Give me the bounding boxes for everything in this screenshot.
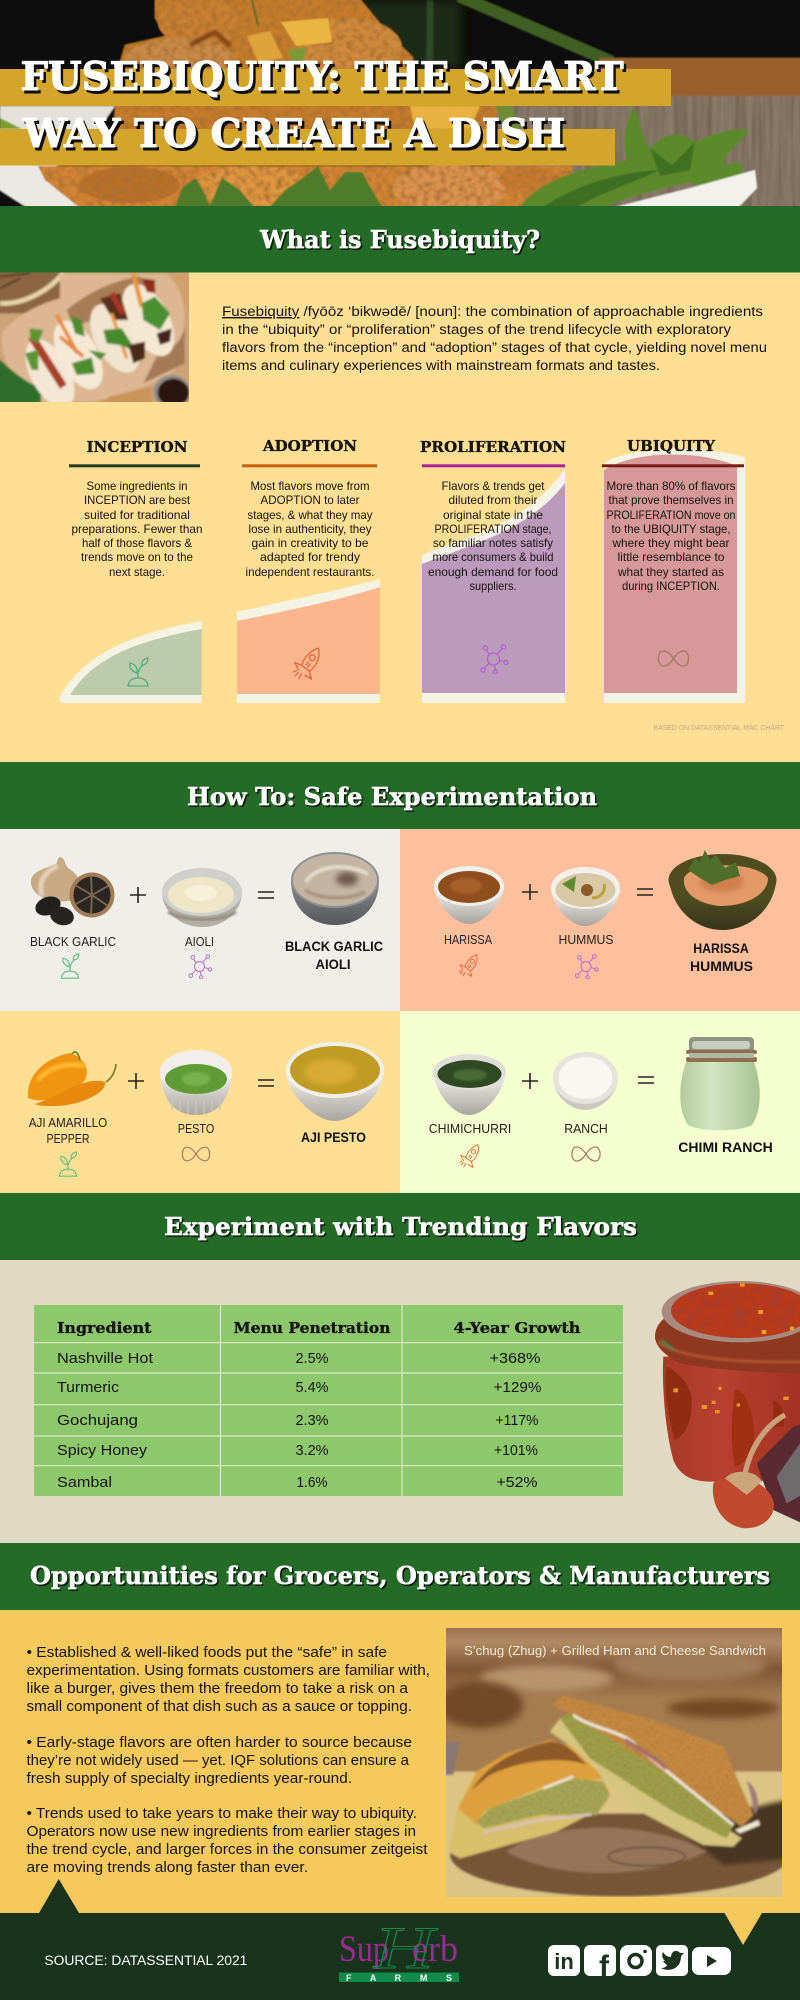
row: Spicy Honey — [57, 1443, 538, 1459]
row: Sambal: Sambal — [57, 1475, 112, 1491]
photo caption: S’chug (Zhug) + Grilled Ham and Cheese Sandwich — [464, 1643, 766, 1658]
bullet three: • Trends used to take years to make their way to ubiquity. — [26, 1806, 417, 1822]
inception body text: suited for traditional — [84, 508, 190, 522]
trending flavors table — [34, 1305, 623, 1496]
adoption body text: independent restaurants. — [246, 565, 374, 579]
adoption body text: ADOPTION to later — [260, 493, 360, 507]
ubiquity heading: UBIQUITY — [627, 437, 715, 455]
panel: chimi ranch — [400, 1011, 800, 1193]
stage: inception — [59, 438, 202, 703]
proliferation body text: Flavors & trends get — [442, 479, 545, 493]
section header: How To: How To: Safe Experimentation — [187, 782, 597, 811]
food: aji pesto bowl — [286, 1042, 384, 1121]
footer — [0, 1879, 800, 2000]
food: ranch bowl — [553, 1052, 618, 1110]
bullet two — [26, 1735, 412, 1787]
row: Nashville Hot: +368% — [490, 1351, 541, 1367]
bullet three: are moving trends along faster than ever. — [26, 1860, 308, 1876]
proliferation body text: original state in the — [443, 508, 543, 522]
row: Spicy Honey: 3.2% — [296, 1443, 329, 1459]
icon: sprout — [61, 954, 79, 978]
equals sign — [638, 1077, 654, 1083]
row: Gochujang: Gochujang — [57, 1413, 138, 1429]
result label: chimi ranch: CHIMI RANCH — [678, 1140, 773, 1155]
proliferation body text: suppliers. — [470, 579, 516, 593]
label: aji amarillo pepper: PEPPER — [46, 1131, 90, 1146]
adoption curve chart — [237, 579, 380, 703]
icon: sprout — [128, 658, 148, 686]
row: Turmeric: +129% — [494, 1380, 542, 1396]
plus sign — [130, 887, 146, 903]
result label: harissa hummus: HUMMUS — [690, 959, 753, 974]
section header: Experiment with Trending Flavors: Experiment with Trending Flavors — [164, 1212, 637, 1241]
icon: twitter — [656, 1945, 688, 1976]
proliferation body text — [428, 479, 558, 593]
inception body text — [72, 479, 202, 579]
photo: bao tacos — [0, 272, 189, 402]
plus sign — [522, 1073, 538, 1089]
equals sign — [258, 1080, 274, 1086]
adoption body text — [246, 479, 374, 579]
label: pesto: PESTO — [178, 1121, 214, 1136]
bullet two: fresh supply of specialty ingredients year-round. — [26, 1771, 352, 1787]
inception curve chart — [59, 621, 201, 703]
food: chimichurri bowl — [433, 1054, 506, 1115]
definition text block: Fusebiquity /fyōōz ‘bikwədē/ [noun]: the combination of approachable ingredients — [222, 304, 763, 320]
bullet two: they’re not widely used — yet. IQF solutions can ensure a — [26, 1753, 410, 1769]
proliferation body text: so familiar notes satisfy — [433, 536, 553, 550]
bullet one: • Established & well-liked foods put the “safe” in safe — [26, 1645, 387, 1661]
logo: SupHerb Farms: H — [373, 1915, 439, 1981]
icon: molecule — [575, 955, 598, 979]
panel: harissa hummus — [400, 829, 800, 1011]
chart source note: BASED ON DATASSENTIAL MAC CHART — [654, 725, 785, 732]
icon: infinity — [182, 1147, 210, 1161]
ubiquity curve chart — [604, 449, 745, 703]
food: aioli bowl — [162, 868, 242, 927]
icon: molecule — [481, 645, 508, 674]
speech pointer down — [724, 1913, 762, 1945]
panel: opportunities — [0, 1610, 800, 1918]
icon: linkedin — [548, 1945, 580, 1976]
food: chimi ranch jar — [680, 1037, 760, 1130]
row: Spicy Honey: Spicy Honey — [57, 1443, 148, 1459]
row: Sambal: +52% — [496, 1475, 538, 1491]
ubiquity body text: where they might bear — [611, 536, 730, 550]
icon: rocket — [293, 648, 319, 679]
ubiquity body text: what they started as — [617, 565, 724, 579]
icon: rocket — [459, 955, 477, 976]
ubiquity body text: during INCEPTION. — [622, 579, 720, 593]
result label: harissa hummus: HARISSA — [693, 941, 749, 956]
logo: SupHerb Farms: Sup — [339, 1929, 389, 1970]
ubiquity body text: that prove themselves in — [608, 493, 734, 507]
stage: proliferation — [420, 438, 566, 703]
food: hummus bowl — [551, 867, 620, 926]
label: chimichurri: CHIMICHURRI — [429, 1121, 511, 1136]
title text line two: WAY TO CREATE A DISH — [22, 111, 565, 157]
icon: instagram — [620, 1945, 652, 1976]
equals sign — [258, 892, 274, 898]
adoption body text: lose in authenticity, they — [248, 522, 372, 536]
row: Sambal: 1.6% — [296, 1475, 328, 1491]
section header: Opportunities — [0, 1543, 800, 1610]
inception heading: INCEPTION — [86, 438, 188, 456]
result label: black garlic aioli: BLACK GARLIC — [285, 939, 383, 954]
label: aji amarillo pepper: AJI AMARILLO — [29, 1115, 107, 1130]
inception body text: INCEPTION are best — [84, 493, 191, 507]
result label: harissa hummus — [690, 941, 753, 974]
logo: SupHerb Farms — [339, 1915, 459, 1983]
bullet one: small component of that dish such as a sauce or topping. — [26, 1699, 412, 1715]
bullet two: • Early-stage flavors are often harder to source because — [26, 1735, 412, 1751]
inception body text: half of those flavors & — [82, 536, 192, 550]
row: Turmeric: 5.4% — [296, 1380, 329, 1396]
table header: Menu Penetration — [234, 1320, 391, 1337]
label: aioli: AIOLI — [185, 934, 214, 949]
icon: linkedin: in — [554, 1949, 574, 1974]
source text: SOURCE: DATASSENTIAL 2021 — [44, 1952, 248, 1968]
row: Turmeric: Turmeric — [57, 1380, 119, 1396]
bullet one: like a burger, gives them the freedom to take a risk on a — [26, 1681, 409, 1697]
plus sign — [128, 1073, 144, 1089]
plus sign — [522, 884, 538, 900]
result label: black garlic aioli: AIOLI — [316, 957, 350, 972]
food: black garlic aioli bowl — [291, 852, 379, 925]
proliferation body text: PROLIFERATION stage, — [434, 522, 552, 536]
table header — [57, 1320, 581, 1337]
icon: sprout — [59, 1152, 77, 1176]
photo: grilled ham and cheese sandwich — [446, 1628, 782, 1897]
section header: Experiment with Trending Flavors — [0, 1193, 800, 1260]
inception body text: Some ingredients in — [86, 479, 188, 493]
social icons — [548, 1945, 731, 1983]
row: Gochujang: 2.3% — [296, 1413, 329, 1429]
icon: infinity — [658, 651, 689, 666]
title banner — [0, 54, 671, 166]
section header: Opportunities: Opportunities for Grocers, Operators & Manufacturers — [30, 1561, 770, 1590]
panel: aji pesto — [0, 1011, 400, 1193]
row: Turmeric — [57, 1380, 542, 1396]
food: harissa bowl — [434, 866, 504, 924]
row: Sambal — [57, 1475, 538, 1491]
logo: SupHerb Farms: erb — [412, 1929, 458, 1970]
proliferation body text: diluted from their — [448, 493, 538, 507]
label: harissa: HARISSA — [444, 932, 492, 947]
label: black garlic: BLACK GARLIC — [30, 934, 116, 949]
row: Gochujang: +117% — [496, 1413, 539, 1429]
gold bar: line two — [0, 129, 615, 166]
adoption body text: adapted for trendy — [260, 550, 360, 564]
title text line one: FUSEBIQUITY: THE SMART — [20, 54, 624, 100]
bullet three: Operators now use new ingredients from earlier stages in — [26, 1824, 416, 1840]
panel: trending flavors — [0, 1260, 800, 1543]
speech pointer up — [39, 1879, 79, 1913]
definition text block: items and culinary experiences with mainstream formats and tastes. — [222, 358, 660, 374]
hero photo: fried chicken on a plate — [0, 0, 800, 216]
inception body text: preparations. Fewer than — [72, 522, 202, 536]
adoption body text: gain in creativity to be — [252, 536, 369, 550]
proliferation body text: more consumers & build — [432, 550, 554, 564]
icon: rocket — [459, 1145, 478, 1167]
table header: Ingredient — [57, 1320, 152, 1337]
proliferation curve chart — [422, 469, 565, 703]
ubiquity body text: More than 80% of flavors — [606, 479, 736, 493]
result label: black garlic aioli — [285, 939, 383, 972]
ubiquity body text: to the UBIQUITY stage, — [612, 522, 730, 536]
food: pesto ramekin — [160, 1050, 232, 1115]
row: Spicy Honey: +101% — [494, 1443, 538, 1459]
inception body text: trends move on to the — [81, 550, 193, 564]
row: Nashville Hot — [57, 1351, 541, 1367]
label: aji amarillo pepper — [29, 1115, 107, 1146]
definition text block: in the “ubiquity” or “proliferation” stages of the trend lifecycle with exploratory — [222, 322, 732, 338]
row: Nashville Hot: Nashville Hot — [57, 1351, 153, 1367]
ubiquity body text: PROLIFERATION move on — [606, 508, 736, 522]
result label: aji pesto: AJI PESTO — [301, 1130, 366, 1145]
ubiquity body text: little resemblance to — [618, 550, 725, 564]
ubiquity body text — [606, 479, 736, 593]
section header: How To — [0, 762, 800, 829]
row: Gochujang — [57, 1413, 539, 1429]
adoption body text: stages, & what they may — [248, 508, 373, 522]
bullet one — [26, 1645, 430, 1715]
icon: facebook: f — [599, 1950, 610, 1983]
photo: jar of chili paste and dried chili — [655, 1281, 800, 1530]
inception body text: next stage. — [109, 565, 165, 579]
definition text block: flavors from the “inception” and “adoption” stages of that cycle, yielding novel menu — [222, 340, 767, 356]
stage: adoption — [237, 437, 380, 703]
section header: What is Fusebiquity: What is Fusebiquity? — [259, 225, 540, 254]
food: black garlic — [31, 857, 114, 928]
proliferation body text: enough demand for food — [428, 565, 558, 579]
bullet three — [26, 1806, 427, 1876]
section header: What is Fusebiquity — [0, 206, 800, 272]
definition text block — [222, 304, 767, 374]
adoption heading: ADOPTION — [262, 437, 357, 455]
stage: ubiquity — [602, 437, 745, 703]
label: ranch: RANCH — [564, 1121, 608, 1136]
equals sign — [637, 889, 653, 895]
panel: black garlic aioli — [0, 829, 400, 1011]
logo: SupHerb Farms: F A R M S — [346, 1973, 452, 1983]
gold bar: line one — [0, 69, 671, 106]
bullet three: the trend cycle, and larger forces in the consumer zeitgeist — [26, 1842, 427, 1858]
icon: facebook — [584, 1945, 616, 1983]
label: hummus: HUMMUS — [558, 932, 614, 947]
row: Nashville Hot: 2.5% — [296, 1351, 329, 1367]
icon: infinity — [572, 1147, 600, 1161]
proliferation heading: PROLIFERATION — [420, 438, 566, 456]
icon: youtube — [692, 1947, 731, 1975]
food: aji amarillo peppers — [28, 1052, 116, 1106]
food: harissa hummus bowl — [668, 850, 776, 930]
icon: molecule — [189, 955, 212, 979]
adoption body text: Most flavors move from — [250, 479, 370, 493]
bullet one: experimentation. Using formats customers are familiar with, — [26, 1663, 430, 1679]
table header: 4-Year Growth — [454, 1320, 581, 1337]
